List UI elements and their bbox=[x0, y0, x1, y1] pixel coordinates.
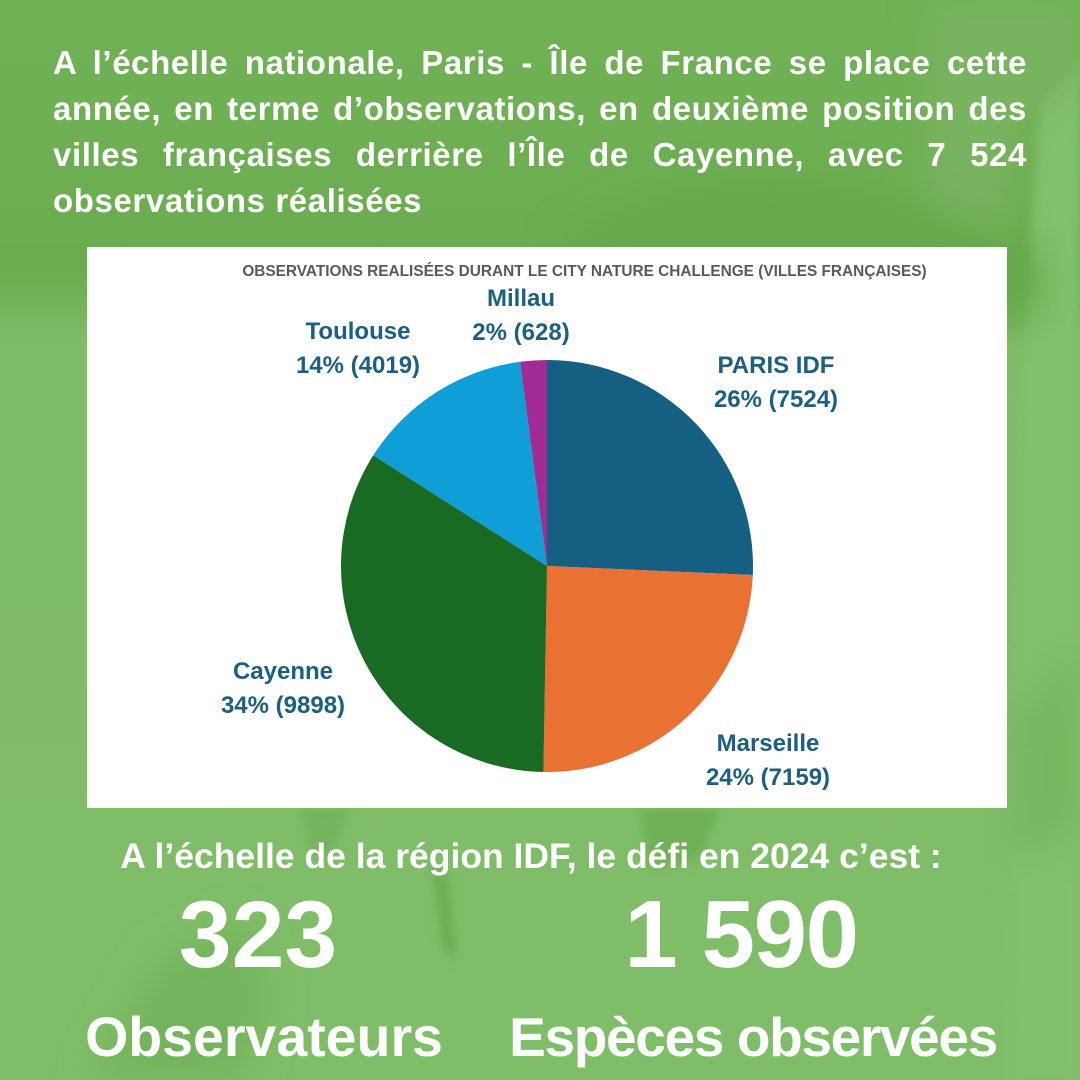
label: Paris IDF: PARIS IDF bbox=[718, 352, 834, 379]
subheading: A l’échelle de la région IDF, le défi en 2024 c’est : bbox=[120, 836, 942, 876]
label: Marseille bbox=[706, 730, 830, 791]
intro text block: villes françaises derrière l’Île de Cayenne, avec 7 524 bbox=[53, 136, 1027, 173]
label: Cayenne: 34% (9898) bbox=[221, 692, 345, 719]
intro text block bbox=[53, 44, 1027, 219]
label: Marseille: Marseille bbox=[717, 730, 819, 757]
label: Toulouse: Toulouse bbox=[306, 318, 410, 345]
stat: species count: 1 590 bbox=[624, 881, 858, 988]
panel: pie chart card bbox=[87, 247, 1007, 808]
label: Paris IDF bbox=[714, 352, 838, 413]
slice: Cayenne bbox=[341, 455, 547, 772]
slice: Toulouse bbox=[373, 362, 547, 566]
label: Millau bbox=[472, 285, 570, 346]
stat label: observers: Observateurs bbox=[85, 1006, 443, 1068]
chart title: OBSERVATIONS REALISÉES DURANT LE CITY NATURE CHALLENGE (VILLES FRANÇAISES) bbox=[242, 263, 927, 280]
slice: Marseille bbox=[543, 566, 753, 772]
intro text block: observations réalisées bbox=[53, 182, 422, 219]
slice: Paris IDF bbox=[547, 360, 753, 575]
label: Cayenne: Cayenne bbox=[233, 658, 333, 685]
label: Millau: 2% (628) bbox=[472, 319, 570, 346]
stat: observers count: 323 bbox=[179, 882, 337, 988]
label: Cayenne bbox=[221, 658, 345, 719]
label: Toulouse bbox=[296, 318, 420, 379]
stat label: species: Espèces observées bbox=[509, 1006, 997, 1068]
intro text block: A l’échelle nationale, Paris - Île de France se place cette bbox=[53, 44, 1027, 81]
label: Marseille: 24% (7159) bbox=[706, 764, 830, 791]
label: Toulouse: 14% (4019) bbox=[296, 352, 420, 379]
label: Millau: Millau bbox=[487, 285, 555, 312]
intro text block: année, en terme d’observations, en deuxième position des bbox=[53, 90, 1027, 127]
label: Paris IDF: 26% (7524) bbox=[714, 386, 838, 413]
slice: Millau bbox=[520, 360, 547, 566]
